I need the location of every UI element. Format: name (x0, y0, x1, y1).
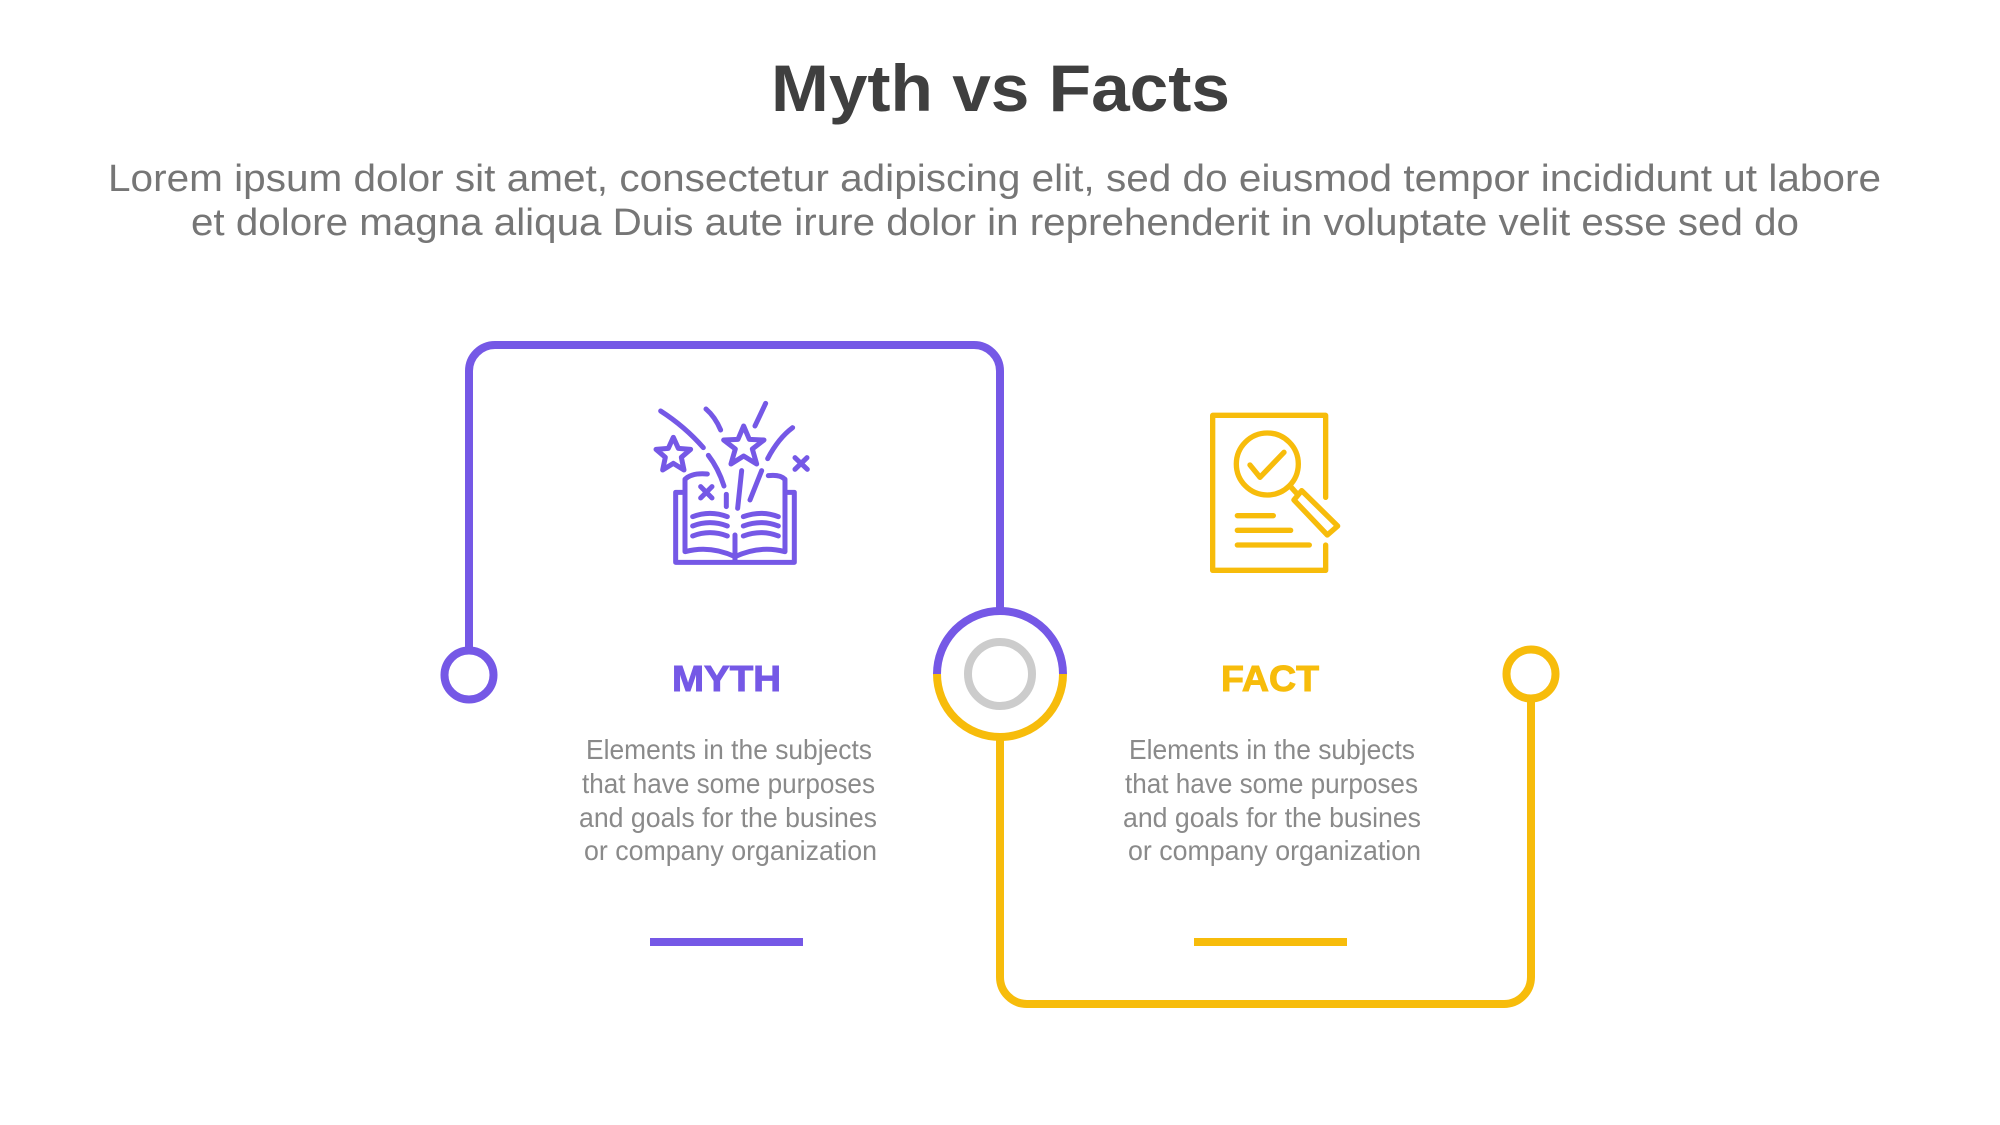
text block: fact description: Elements in the subjects (1129, 734, 1415, 765)
yellow fact connector frame (1000, 650, 1556, 1004)
text block: myth description: or company organization (584, 835, 877, 866)
purple myth connector frame (444, 345, 1000, 700)
icon: document with magnifier check (1213, 415, 1338, 570)
text block: myth description: and goals for the busines (579, 802, 877, 833)
purple end node (444, 650, 494, 700)
text block: fact description: or company organization (1128, 835, 1421, 866)
icon: open book with stars (656, 403, 807, 562)
central junction node (937, 611, 1063, 737)
fact underline (1194, 938, 1347, 946)
text block: myth description: Elements in the subjects (586, 734, 872, 765)
subtitle text block: et dolore magna aliqua Duis aute irure dolor in reprehenderit in voluptate velit esse sed do (191, 202, 1799, 244)
subtitle text block: Lorem ipsum dolor sit amet, consectetur adipiscing elit, sed do eiusmod tempor incididunt ut labore (108, 158, 1881, 200)
myth underline (650, 938, 803, 946)
text block: fact description (1123, 734, 1421, 866)
subtitle text block (108, 158, 1881, 244)
text block: fact description: that have some purposes (1125, 768, 1418, 799)
text block: myth description (579, 734, 877, 866)
heading: MYTH: MYTH (672, 658, 781, 699)
text block: fact description: and goals for the busines (1123, 802, 1421, 833)
title: Myth vs Facts (771, 51, 1230, 125)
yellow end node (1506, 650, 1556, 698)
heading: FACT: FACT (1221, 658, 1319, 699)
text block: myth description: that have some purposes (582, 768, 875, 799)
